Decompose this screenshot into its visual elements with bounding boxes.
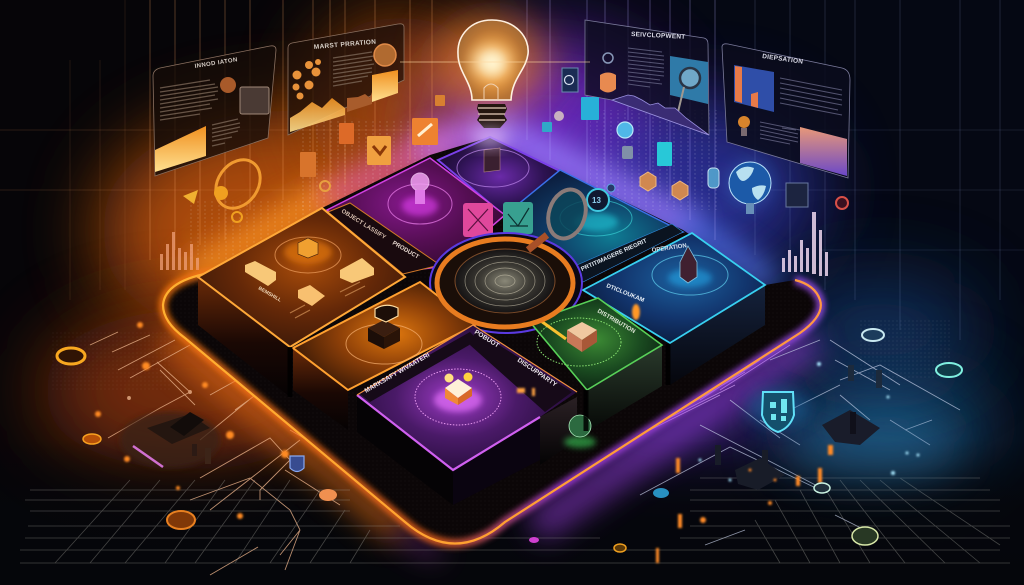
rings [560, 200, 632, 236]
panel: Market Exploration document [288, 24, 404, 135]
icon: badge [587, 184, 615, 211]
icon: block cap [375, 305, 398, 322]
panel: top violet tile [438, 131, 562, 216]
glowing lights [95, 322, 289, 519]
text block [760, 78, 842, 144]
heading: Innovation: INNOD IATON [194, 57, 238, 70]
ring connector: violet halo [430, 233, 582, 333]
panel: magenta tile [327, 158, 505, 274]
icon group: orange floating icons [183, 95, 445, 204]
panel: green tile [530, 298, 662, 431]
icon: glowing shield [746, 388, 810, 432]
icon: brain bulb [738, 116, 750, 136]
glow over top centre [432, 14, 548, 110]
icon: pink bulb [411, 173, 429, 204]
panel: Dispersion document [722, 44, 850, 178]
bottom perspective grid [20, 478, 1010, 563]
heading: Market: MARST PRRATION [314, 39, 377, 51]
icon: badge: 13 [592, 196, 601, 205]
icon: cream block right [340, 258, 374, 283]
label: DISTRIBUTION [596, 309, 636, 335]
rings [537, 318, 621, 366]
label strip [470, 330, 572, 412]
dotted texture: lower right [860, 320, 950, 380]
rings [652, 255, 728, 295]
icon: hooded block [680, 246, 697, 283]
label: PRODUCT [391, 241, 420, 261]
text block [333, 52, 374, 86]
heading: Dispersion: DIEPSATION [762, 53, 804, 66]
heading: Development: SEIVCLOPWENT [631, 31, 686, 41]
chart: gradient area [800, 127, 847, 176]
icon: tan cube [567, 322, 597, 352]
concentric lens rings [465, 256, 545, 306]
dotted texture: lower left [50, 330, 170, 390]
background vertical grid lines [0, 0, 1024, 340]
icon: ring badge [374, 44, 396, 66]
circuit lines: lower left [90, 332, 350, 575]
chart: orange area [155, 126, 206, 172]
icon: magnifier [678, 68, 700, 112]
orange lamps [517, 388, 535, 396]
icon: green orb [564, 415, 596, 448]
label strip [328, 203, 440, 274]
bulb filament stem [484, 84, 498, 100]
icon: pink checkbox [463, 203, 493, 237]
icon: orange ball [220, 77, 236, 93]
platform base [163, 137, 821, 544]
icon: picture tile [240, 87, 269, 114]
icon: coin cluster [292, 59, 321, 100]
icon: globe bulb [726, 160, 774, 214]
icon: cream block middle [298, 285, 325, 306]
icon: cream block left [245, 261, 276, 286]
image: search tile [670, 56, 708, 104]
icon: central block [298, 238, 318, 258]
icon: database cylinder [504, 486, 522, 506]
icon group: glowing ring nodes [57, 329, 962, 552]
neon edge [357, 395, 540, 470]
platform dotted surface [163, 137, 821, 544]
label: PRTITIMAGERE RIEGRIT [580, 238, 648, 273]
panel: Development document [585, 20, 709, 135]
chart: tall bars [372, 70, 398, 102]
icon: block [484, 148, 500, 172]
rings [388, 184, 452, 224]
neon glow behind board top edges [200, 128, 765, 278]
panel: large orange tile [198, 208, 405, 397]
chart: right glowing bars [782, 212, 828, 276]
chart: orange columns [735, 66, 758, 108]
text block [628, 48, 664, 87]
neon streak [133, 446, 163, 467]
panel: front purple tile [357, 325, 577, 505]
circuit lines: lower right [640, 340, 960, 545]
orange top edge [357, 325, 577, 395]
icon: light bulb [458, 20, 528, 128]
platform halo [163, 272, 821, 544]
city: lower left [95, 322, 289, 519]
orange lamp [632, 304, 640, 320]
city: lower right [656, 362, 960, 563]
icon: small blue shield [290, 456, 304, 472]
text block [160, 80, 240, 146]
rings [346, 324, 422, 364]
icon: stacked cube [444, 372, 472, 405]
panel dividers [290, 344, 668, 431]
label strip [360, 332, 478, 402]
label: BEMSHILL [257, 286, 282, 304]
panel: blue tile [583, 233, 765, 385]
text block [290, 282, 365, 318]
main ring: orange magnifier [437, 239, 573, 339]
icon: gear ring [207, 151, 269, 222]
rings [457, 149, 529, 187]
light flare line [400, 61, 590, 63]
glowing lights [656, 445, 833, 563]
label: market evaluation: MARKSAFY WIVAATERI [364, 352, 431, 395]
label: discovery: DISCUPPARTY [516, 357, 559, 389]
label: product: POBUOT [473, 329, 500, 349]
panel: lower orange tile [293, 282, 475, 430]
chart: left glowing bars [160, 232, 199, 270]
label strip [570, 224, 683, 282]
top glow [472, 131, 508, 145]
chart: area left [290, 98, 345, 132]
bulb base [477, 104, 507, 128]
panel: teal tile [503, 170, 683, 282]
chart: purple line [612, 95, 709, 135]
icon group: blue floating icons [542, 53, 848, 209]
icon: dark block [368, 320, 400, 349]
label: DTICLOUKAM [605, 283, 645, 304]
icon: magnifying glass [528, 185, 592, 250]
platform neon outline [163, 272, 821, 544]
panel: Innovation document [153, 46, 276, 176]
bulb core glow [474, 49, 508, 75]
chart: area right [347, 92, 372, 112]
outer glow along platform edges [170, 335, 815, 555]
label: OBJECT LASSIFY [340, 209, 387, 241]
rings [415, 369, 501, 425]
rings [275, 237, 341, 273]
blue lights [698, 362, 920, 482]
icon: teal checkbox [503, 202, 533, 234]
label: OPERATION [651, 243, 687, 254]
chart: column tile [734, 65, 774, 112]
